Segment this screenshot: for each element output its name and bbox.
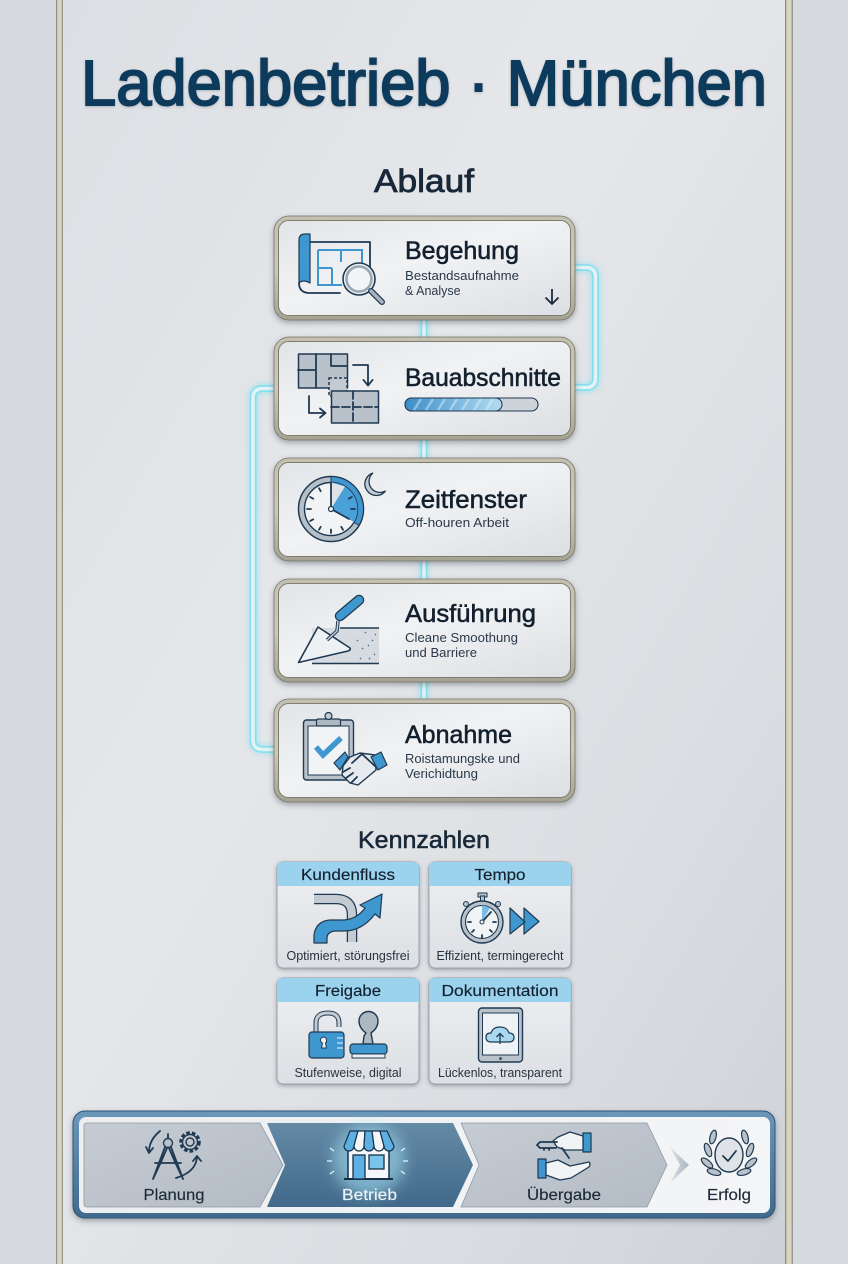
caption: Kundenfluss: Optimiert, störungsfrei — [286, 949, 410, 963]
step: Erfolg — [700, 1129, 758, 1204]
icon: store — [327, 1131, 408, 1179]
icon: trowel on plaster — [298, 600, 379, 664]
heading: Ablauf: Ablauf — [374, 163, 474, 199]
icon: hands passing key — [537, 1132, 591, 1180]
heading: Ausführung: Ausführung — [405, 600, 536, 628]
panel: Ausführung — [274, 579, 575, 682]
arrow: down — [546, 289, 558, 304]
heading: Abnahme: Abnahme — [405, 721, 512, 749]
connectors: glowing process lines — [253, 268, 596, 750]
text: Ausführung description: Cleane Smoothung — [405, 631, 518, 645]
label: Kundenfluss: Kundenfluss — [301, 867, 395, 884]
label: Erfolg: Erfolg — [707, 1187, 751, 1204]
heading: Bauabschnitte: Bauabschnitte — [405, 364, 561, 392]
icon: floor plan sections — [298, 354, 378, 423]
icon: clipboard with handshake — [304, 712, 387, 785]
left rail — [56, 0, 63, 1264]
card: Kundenfluss — [277, 862, 419, 968]
step: Übergabe — [461, 1123, 667, 1207]
label: Dokumentation: Dokumentation — [442, 983, 558, 1000]
icon: flow arrow — [314, 894, 382, 943]
icon: stopwatch and fast forward — [461, 893, 539, 943]
card: Freigabe — [277, 978, 419, 1084]
panel: Zeitfenster — [274, 458, 575, 561]
progress bar — [405, 398, 538, 411]
title: Ladenbetrieb · München — [81, 47, 767, 119]
label: Übergabe: Übergabe — [527, 1186, 601, 1204]
panel: Abnahme — [274, 699, 575, 802]
icon: open lock and stamp — [309, 1012, 387, 1058]
panel: phase bar — [73, 1111, 775, 1218]
heading: Begehung: Begehung — [405, 237, 519, 265]
label: Freigabe: Freigabe — [315, 983, 381, 1000]
step: Planung — [84, 1123, 283, 1207]
right rail — [785, 0, 793, 1264]
caption: Tempo: Effizient, termingerecht — [436, 949, 564, 963]
icon: compass and gear — [146, 1131, 201, 1179]
card: Tempo — [429, 862, 571, 968]
text: Begehung description: & Analyse — [405, 284, 461, 298]
label: Planung: Planung — [144, 1187, 204, 1204]
heading: Zeitfenster: Zeitfenster — [405, 486, 527, 514]
icon: laurel wreath with check — [700, 1129, 758, 1177]
text: Begehung description: Bestandsaufnahme — [405, 269, 519, 283]
panel: Bauabschnitte — [274, 337, 575, 440]
label: Betrieb: Betrieb — [342, 1187, 397, 1204]
text: Abnahme description: Roistamungske und — [405, 752, 520, 766]
text: Ausführung description: und Barriere — [405, 646, 477, 660]
panel: Begehung — [274, 216, 575, 320]
heading: Kennzahlen: Kennzahlen — [358, 827, 490, 854]
icon: tablet with cloud upload — [478, 1008, 522, 1062]
step: Betrieb — [267, 1123, 473, 1207]
text: Zeitfenster description: Off-houren Arbeit — [405, 516, 510, 530]
icon: blueprint with magnifier — [299, 234, 382, 302]
caption: Dokumentation: Lückenlos, transparent — [438, 1066, 563, 1080]
caption: Freigabe: Stufenweise, digital — [294, 1066, 402, 1080]
text: Abnahme description: Verichidtung — [405, 767, 478, 781]
arrow: to Erfolg — [670, 1147, 689, 1183]
label: Tempo: Tempo — [474, 867, 526, 884]
icon: clock with moon — [298, 473, 386, 542]
card: Dokumentation — [429, 978, 571, 1084]
